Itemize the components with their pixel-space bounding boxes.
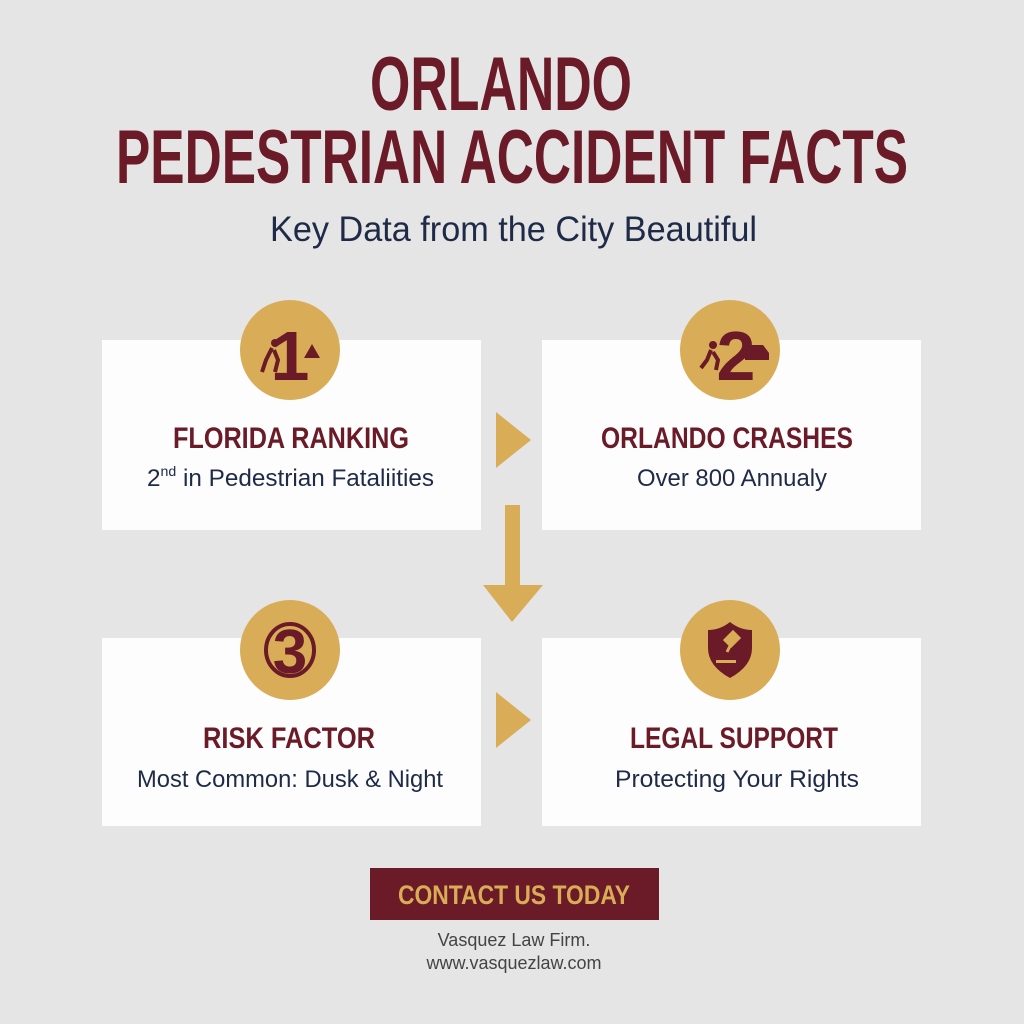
icon: number 3 <box>240 600 340 700</box>
arrow: right bottom <box>496 692 531 748</box>
icon: number 2 car: 2 <box>717 317 755 395</box>
heading: RISK FACTOR <box>203 722 375 755</box>
text: Most Common: Dusk & Night <box>137 766 443 793</box>
panel: orlando crashes <box>542 300 921 530</box>
text: Over 800 Annualy <box>637 465 827 492</box>
heading: ORLANDO CRASHES <box>601 422 853 455</box>
icon: shield gavel <box>680 600 780 700</box>
arrow: down <box>483 505 543 622</box>
icon: number 1 pedestrian: 1 <box>271 317 309 395</box>
text: nd <box>161 463 176 479</box>
text: Protecting Your Rights <box>615 766 859 793</box>
heading: LEGAL SUPPORT <box>630 722 838 755</box>
icon: number 1 pedestrian <box>240 300 340 400</box>
title: ORLANDO <box>370 42 632 127</box>
footer text: Vasquez Law Firm. <box>438 930 590 950</box>
panel: risk factor <box>102 600 481 826</box>
button: contact <box>370 868 659 920</box>
panel: legal support <box>542 600 921 826</box>
subtitle: Key Data from the City Beautiful <box>270 210 757 249</box>
footer text: www.vasquezlaw.com <box>425 953 602 973</box>
panel: florida ranking <box>102 300 481 530</box>
arrow: right top <box>496 412 531 468</box>
text: 2 <box>147 465 160 492</box>
text: in Pedestrian Fataliities <box>176 465 434 492</box>
icon: number 2 car <box>680 300 780 400</box>
icon: number 3: 3 <box>273 618 307 687</box>
title <box>116 42 908 200</box>
button: contact: CONTACT US TODAY <box>398 880 630 910</box>
footer text <box>425 930 602 973</box>
heading: FLORIDA RANKING <box>173 422 409 455</box>
